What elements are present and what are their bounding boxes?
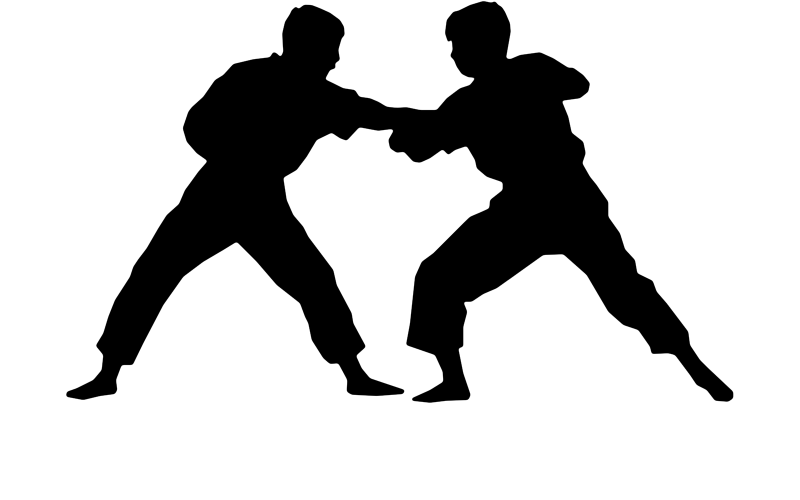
- silhouette: left fighter: [66, 5, 405, 400]
- silhouette: right fighter: [385, 1, 733, 403]
